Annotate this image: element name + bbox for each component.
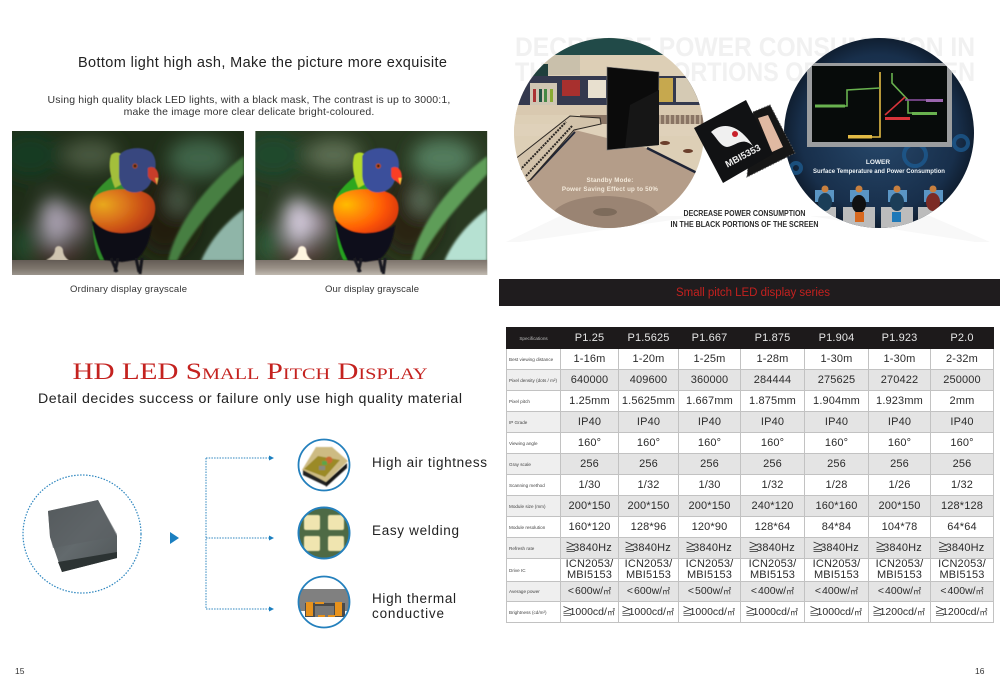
row: viewing angle: 160° — [888, 436, 911, 448]
row: refresh rate: ≧3840Hz — [565, 542, 612, 554]
row: IP grade: IP40 — [698, 416, 721, 428]
row: module size: 200*150 — [627, 500, 670, 512]
icon: solder pads — [298, 507, 350, 559]
row: pixel density: 284444 — [754, 374, 791, 386]
row: viewing distance: 1-25m — [694, 352, 725, 364]
row: average power: Average power — [509, 589, 540, 594]
label: high air tightness: High air tightness — [372, 455, 487, 470]
table header: P1.904 — [819, 332, 854, 344]
illustration: mall standby mode — [514, 38, 704, 244]
page number 15: 15 — [15, 666, 25, 676]
row: viewing distance: 1-30m — [821, 352, 852, 364]
row: pixel pitch: 1.25mm — [569, 394, 610, 406]
label: high thermal conductive: conductive — [372, 606, 444, 621]
row: IP grade: IP40 — [888, 416, 911, 428]
row: drive IC: Drive IC — [509, 568, 526, 572]
row: drive IC: MBI5153 — [626, 569, 671, 581]
illustration: transit screen low temperature: LOWER — [866, 159, 890, 166]
row: pixel pitch: 1.923mm — [876, 394, 923, 406]
row: pixel density: 360000 — [691, 374, 728, 386]
photo: our display — [243, 131, 487, 275]
row: IP grade: IP40 — [950, 416, 974, 428]
LED package in dotted circle — [23, 475, 141, 593]
row: scanning method: 1/32 — [951, 478, 973, 490]
table header: P1.875 — [755, 332, 790, 344]
page number 16: 16 — [975, 666, 985, 676]
row: refresh rate: ≧3840Hz — [624, 542, 671, 554]
row: average power: <600w/㎡ — [568, 585, 611, 597]
illustration: transit screen low temperature: Surface Temperature and Power Consumption — [813, 169, 945, 175]
specification table — [506, 327, 994, 623]
row: module size: 200*150 — [568, 500, 611, 512]
row: average power: <500w/㎡ — [688, 585, 731, 597]
row: gray scale: 256 — [763, 458, 782, 470]
row: IP grade — [507, 412, 993, 432]
caption: our display: Our display grayscale — [325, 284, 419, 295]
row: module resolution: 128*64 — [755, 520, 790, 532]
label: high thermal conductive: High thermal — [372, 591, 456, 606]
row: viewing distance: 2-32m — [946, 352, 978, 364]
row: viewing angle: 160° — [761, 436, 784, 448]
chip MBI5353 — [694, 100, 795, 183]
row: gray scale: 256 — [580, 458, 599, 470]
row: gray scale — [507, 454, 993, 474]
bracket arrows — [206, 456, 274, 612]
row: refresh rate: ≧3840Hz — [812, 542, 859, 554]
table header: P2.0 — [950, 332, 974, 344]
row: scanning method: 1/32 — [637, 478, 660, 490]
table header: P1.5625 — [627, 332, 670, 344]
row: drive IC: MBI5153 — [567, 569, 612, 581]
row: average power: <400w/㎡ — [751, 585, 794, 597]
row: refresh rate: ≧3840Hz — [748, 542, 795, 554]
chip MBI5353: MBI5353 — [724, 143, 763, 170]
caption: ordinary display: Ordinary display grayscale — [70, 284, 187, 295]
row: IP grade: IP40 — [578, 416, 601, 428]
row: average power: <400w/㎡ — [878, 585, 921, 597]
illustration: mall standby mode: Standby Mode: — [587, 177, 633, 184]
row: gray scale: 256 — [700, 458, 719, 470]
row: gray scale: 256 — [890, 458, 909, 470]
row: average power: <400w/㎡ — [940, 585, 984, 597]
row: brightness: ≧1200cd/㎡ — [872, 606, 925, 618]
row: module resolution: 160*120 — [568, 520, 611, 532]
row: module size: 160*160 — [815, 500, 858, 512]
row: drive IC: MBI5153 — [939, 569, 985, 581]
row: viewing angle: 160° — [698, 436, 721, 448]
row: gray scale: 256 — [827, 458, 846, 470]
row: brightness: ≧1000cd/㎡ — [809, 606, 862, 618]
row: gray scale: Gray scale — [509, 462, 531, 466]
row: pixel pitch: 1.875mm — [749, 394, 796, 406]
row: pixel density: 409600 — [630, 374, 667, 386]
intro text: make the image more clear delicate bright-coloured. — [124, 106, 374, 118]
row: IP grade: IP40 — [825, 416, 848, 428]
section subtitle: Detail decides success or failure only use high quality material — [38, 391, 462, 407]
intro text: Using high quality black LED lights, with a black mask, The contrast is up to 3000:1, — [48, 94, 450, 106]
table header: Specifications — [519, 336, 548, 340]
row: viewing angle: Viewing angle — [509, 440, 538, 446]
illustration: mall standby mode: Power Saving Effect up to 50% — [562, 186, 658, 193]
row: pixel density: 270422 — [881, 374, 918, 386]
row: drive IC — [509, 558, 986, 581]
row: module size: 200*150 — [878, 500, 921, 512]
row: module size — [507, 496, 993, 516]
series banner: Small pitch LED display series — [676, 287, 830, 299]
row: viewing distance: Best viewing distance — [509, 356, 553, 362]
row: average power: <400w/㎡ — [815, 585, 858, 597]
row: brightness: Brightness (cd/m²) — [509, 610, 547, 614]
row: module size: 200*150 — [688, 500, 731, 512]
row: scanning method: Scanning method — [509, 482, 545, 488]
row: viewing distance: 1-30m — [884, 352, 915, 364]
row: module resolution: 64*64 — [947, 520, 977, 532]
row: pixel density: 640000 — [571, 374, 608, 386]
table header: P1.667 — [692, 332, 727, 344]
series banner — [499, 279, 1000, 306]
row: IP grade: IP Grade — [509, 420, 527, 424]
chip caption: IN THE BLACK PORTIONS OF THE SCREEN — [670, 220, 819, 229]
page 15 heading: Bottom light high ash, Make the picture more exquisite — [78, 55, 447, 71]
row: viewing angle: 160° — [578, 436, 601, 448]
row: module resolution: 104*78 — [882, 520, 917, 532]
row: scanning method: 1/32 — [761, 478, 784, 490]
row: refresh rate — [507, 538, 993, 558]
chip caption — [670, 209, 819, 229]
row: viewing distance: 1-20m — [633, 352, 664, 364]
row: pixel pitch: 2mm — [950, 394, 974, 406]
row: viewing angle: 160° — [637, 436, 660, 448]
row: IP grade: IP40 — [637, 416, 660, 428]
row: module resolution — [509, 520, 977, 532]
row: module resolution: 128*96 — [631, 520, 666, 532]
icon: sealed LED — [298, 440, 350, 490]
row: pixel density: Pixel density (dots / m²) — [509, 378, 557, 382]
icon: cross section — [298, 576, 350, 628]
row: average power — [507, 582, 993, 601]
row: refresh rate: Refresh rate — [509, 546, 534, 550]
row: viewing angle — [509, 436, 974, 448]
row: drive IC: MBI5153 — [814, 569, 859, 581]
row: average power: <600w/㎡ — [627, 585, 670, 597]
section title: HD LED Small Pitch Display — [72, 359, 428, 384]
photo: ordinary display — [0, 131, 244, 275]
label: easy welding: Easy welding — [372, 523, 459, 538]
row: module resolution: 120*90 — [692, 520, 727, 532]
row: pixel density: 250000 — [943, 374, 981, 386]
row: pixel pitch: Pixel pitch — [509, 398, 530, 404]
row: pixel pitch: 1.5625mm — [622, 394, 675, 406]
row: drive IC: MBI5153 — [877, 569, 922, 581]
illustration: transit screen low temperature — [784, 38, 974, 229]
row: module size: Module size (mm) — [509, 504, 546, 508]
row: brightness: ≧1000cd/㎡ — [682, 606, 735, 618]
row: refresh rate: ≧3840Hz — [875, 542, 922, 554]
row: brightness: ≧1000cd/㎡ — [562, 606, 615, 618]
row: brightness: ≧1000cd/㎡ — [621, 606, 674, 618]
table header: P1.25 — [575, 332, 604, 344]
row: scanning method: 1/30 — [578, 478, 600, 490]
row: pixel density: 275625 — [818, 374, 855, 386]
ghost floor shapes — [506, 216, 990, 242]
label: high thermal conductive — [372, 591, 456, 621]
row: brightness: ≧1200cd/㎡ — [935, 606, 987, 618]
ghost headline — [515, 32, 975, 87]
row: drive IC: MBI5153 — [750, 569, 795, 581]
row: drive IC: MBI5153 — [687, 569, 732, 581]
row: refresh rate: ≧3840Hz — [685, 542, 732, 554]
row: IP grade: IP40 — [761, 416, 784, 428]
row: pixel pitch: 1.667mm — [686, 394, 733, 406]
row: pixel pitch — [509, 394, 974, 406]
row: gray scale: 256 — [639, 458, 658, 470]
row: viewing angle: 160° — [825, 436, 848, 448]
row: pixel pitch: 1.904mm — [813, 394, 860, 406]
row: viewing distance: 1-28m — [757, 352, 788, 364]
row: refresh rate: ≧3840Hz — [938, 542, 984, 554]
row: scanning method — [509, 478, 973, 490]
row: module size: 128*128 — [941, 500, 983, 512]
row: viewing distance — [509, 352, 978, 364]
row: viewing angle: 160° — [950, 436, 974, 448]
table header — [507, 328, 993, 618]
row: gray scale: 256 — [953, 458, 971, 470]
row: scanning method: 1/28 — [825, 478, 848, 490]
intro text — [48, 94, 450, 118]
row: module size: 240*120 — [751, 500, 794, 512]
arrow: pointer triangle — [170, 532, 179, 544]
row: module resolution: Module resolution — [509, 524, 545, 530]
row: pixel density — [507, 370, 993, 390]
row: module resolution: 84*84 — [822, 520, 851, 532]
row: scanning method: 1/26 — [888, 478, 910, 490]
table header: P1.923 — [882, 332, 917, 344]
row: scanning method: 1/30 — [698, 478, 720, 490]
row: brightness: ≧1000cd/㎡ — [745, 606, 798, 618]
row: brightness — [509, 606, 988, 618]
row: viewing distance: 1-16m — [574, 352, 605, 364]
chip caption: DECREASE POWER CONSUMPTION — [684, 209, 806, 218]
